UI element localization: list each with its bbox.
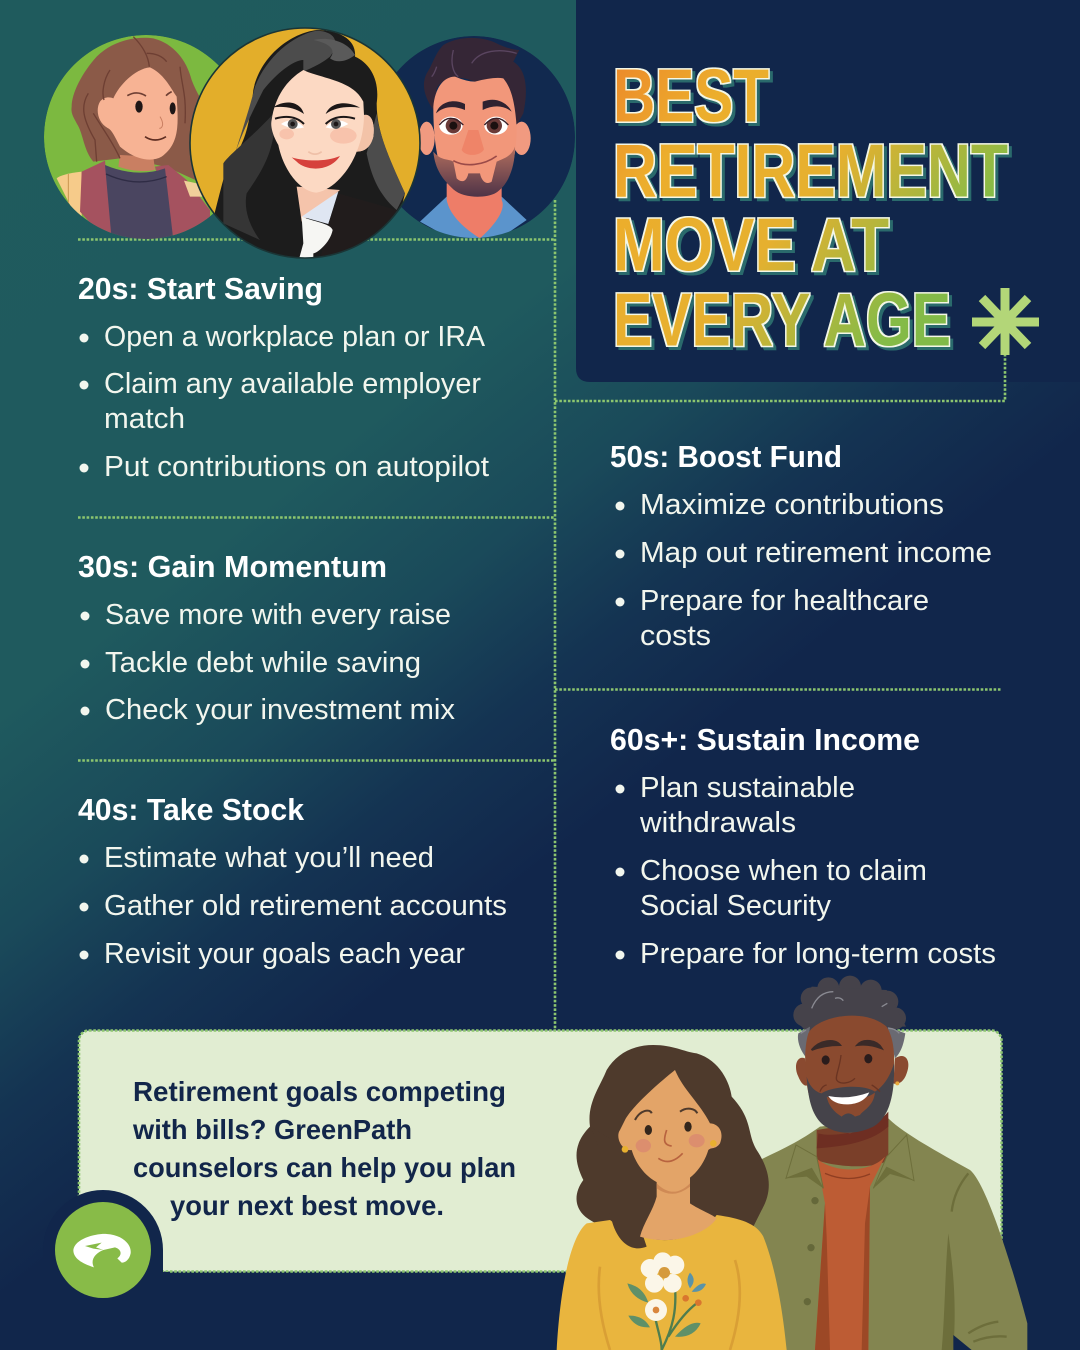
title xyxy=(613,54,1008,362)
list: 50s: Maximize contributions xyxy=(640,489,944,521)
portrait: young woman xyxy=(44,35,219,239)
portrait: woman in blazer xyxy=(190,28,420,263)
list: 50s: Prepare for healthcare xyxy=(640,585,929,617)
callout text: with bills? GreenPath xyxy=(132,1114,412,1145)
woman xyxy=(557,1045,787,1350)
list: 60s: Plan sustainable xyxy=(640,772,855,804)
callout text: counselors can help you plan xyxy=(133,1152,516,1183)
flower embroidery xyxy=(627,1252,706,1350)
callout text: your next best move. xyxy=(170,1190,444,1221)
list: 20s: Open a workplace plan or IRA xyxy=(104,321,486,353)
list: 60s: withdrawals xyxy=(639,807,796,839)
heading: 50s: 50s: Boost Fund xyxy=(610,439,842,474)
list: 60s: Social Security xyxy=(640,890,831,922)
portrait outlines xyxy=(190,28,420,258)
list: 40s: Estimate what you’ll need xyxy=(104,842,434,874)
callout text: Retirement goals competing xyxy=(133,1076,506,1107)
list: 30s: Check your investment mix xyxy=(105,694,455,726)
logo: GreenPath xyxy=(43,1190,170,1350)
list: 30s: Tackle debt while saving xyxy=(105,647,421,679)
list: 40s xyxy=(80,842,507,970)
man xyxy=(747,976,1027,1350)
portrait: man with beard xyxy=(396,36,575,238)
illustration: couple xyxy=(557,976,1027,1350)
title: EVERY AGE xyxy=(613,278,951,362)
heading: 30s: 30s: Gain Momentum xyxy=(78,549,387,584)
list: 60s: Prepare for long-term costs xyxy=(640,938,996,970)
heading: 40s: 40s: Take Stock xyxy=(78,792,305,827)
title panel xyxy=(576,0,1080,382)
panel: 20s xyxy=(78,271,489,483)
title: MOVE AT xyxy=(613,202,889,286)
list: 20s: Claim any available employer xyxy=(104,368,481,400)
list: 40s: Revisit your goals each year xyxy=(104,938,465,970)
list: 40s: Gather old retirement accounts xyxy=(104,890,507,922)
callout text xyxy=(132,1076,516,1221)
callout box xyxy=(79,1030,1002,1272)
title: BEST xyxy=(613,54,769,138)
icon: asterisk xyxy=(972,288,1039,355)
panel: 30s xyxy=(78,549,455,726)
list: 50s xyxy=(616,489,992,652)
list: 30s xyxy=(80,599,455,726)
panel: 40s xyxy=(78,792,507,970)
list: 50s: costs xyxy=(640,620,711,652)
heading: 20s: 20s: Start Saving xyxy=(78,271,323,306)
list: 20s xyxy=(80,321,489,483)
list: 60s: Choose when to claim xyxy=(640,855,927,887)
heading: 60s: 60s+: Sustain Income xyxy=(610,722,920,757)
list: 50s: Map out retirement income xyxy=(640,537,992,569)
list: 60s xyxy=(616,772,996,970)
list: 20s: Put contributions on autopilot xyxy=(104,451,489,483)
list: 20s: match xyxy=(104,403,185,435)
panel: 60s xyxy=(610,722,996,970)
dotted connector lines xyxy=(78,200,1005,1030)
list: 30s: Save more with every raise xyxy=(105,599,451,631)
panel: 50s xyxy=(610,439,992,652)
